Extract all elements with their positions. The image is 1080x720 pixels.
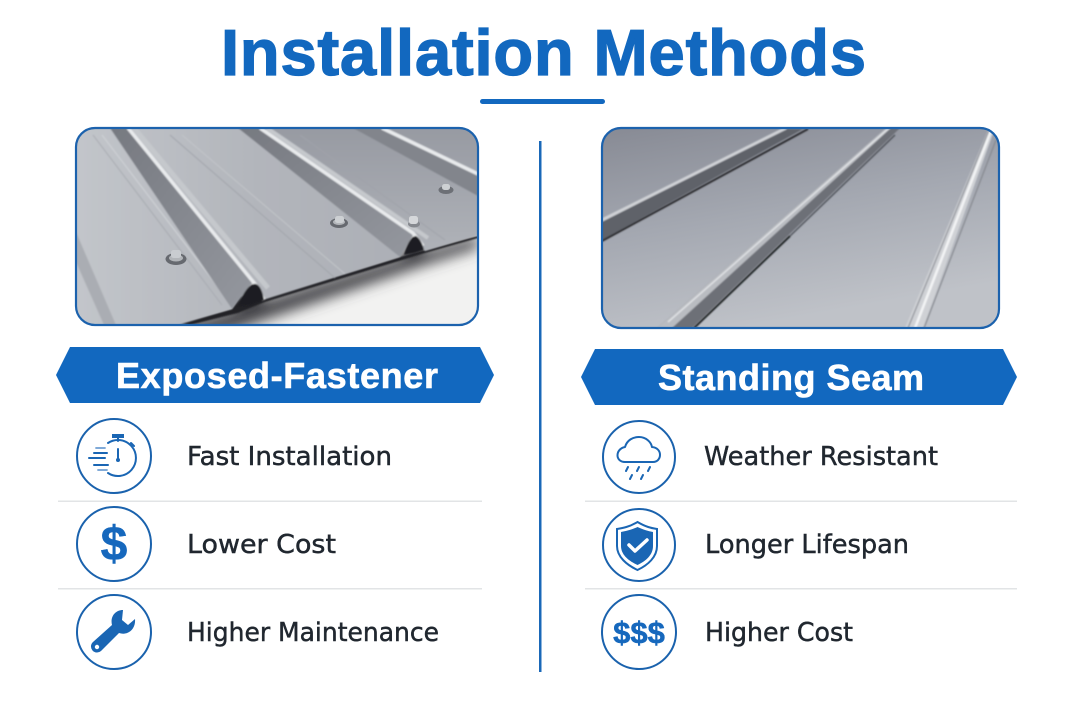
panel: standing seam [581, 128, 1017, 669]
left panel strips [76, 232, 116, 325]
seam 3 [905, 128, 995, 328]
banner: exposed-fastener [56, 347, 494, 403]
label: Fast Installation [187, 442, 392, 472]
seam 2 [657, 128, 900, 328]
rib 3 [353, 128, 478, 196]
icon: dollar: $ [101, 518, 128, 571]
banner: standing seam: Standing Seam [658, 357, 924, 398]
seam 1 [602, 129, 803, 240]
icon: stopwatch [77, 419, 151, 493]
photo: exposed-fastener metal roof [76, 128, 478, 338]
title: Installation Methods [221, 16, 866, 89]
icon: wrench [77, 595, 151, 669]
title underline [480, 99, 605, 104]
icon: triple dollar [602, 595, 676, 669]
panel: exposed-fastener [56, 128, 494, 669]
rib 2 [238, 128, 413, 257]
label: Weather Resistant [704, 442, 938, 472]
centre divider [539, 141, 542, 672]
label: Higher Cost [705, 618, 853, 648]
label: Longer Lifespan [705, 530, 909, 560]
banner: standing seam [581, 349, 1017, 405]
row: lower cost [77, 507, 336, 581]
icon: rain cloud [603, 421, 675, 493]
row: fast installation [77, 419, 392, 493]
row: longer lifespan [603, 509, 909, 581]
rib 1 [110, 128, 252, 309]
row: higher cost [602, 595, 853, 669]
label: Lower Cost [187, 530, 336, 560]
row: higher maintenance [77, 595, 439, 669]
fasteners [166, 253, 186, 265]
icon: dollar [77, 507, 151, 581]
banner: exposed-fastener: Exposed-Fastener [116, 355, 438, 396]
photo: standing seam metal roof [602, 128, 999, 328]
row: weather resistant [603, 421, 938, 493]
label: Higher Maintenance [187, 618, 439, 648]
icon: shield check [603, 509, 675, 581]
icon: triple dollar: $$$ [613, 615, 665, 650]
